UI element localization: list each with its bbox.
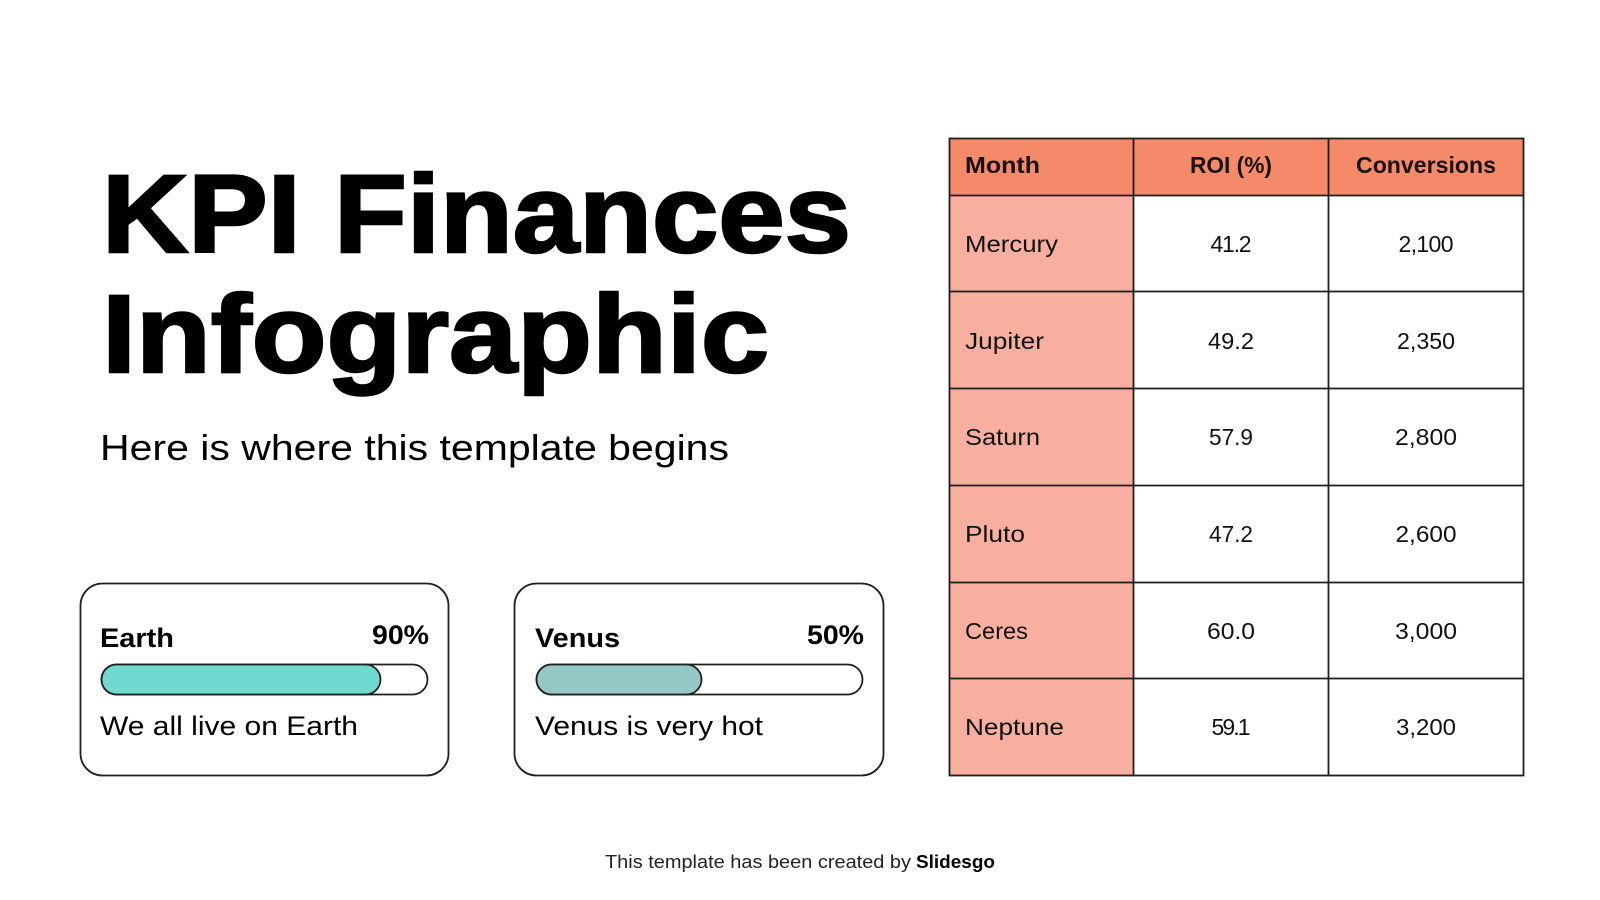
- row: Mercury: 2,100: [1398, 231, 1454, 257]
- table: [950, 138, 1524, 776]
- subtitle: Here is where this template begins: [100, 427, 729, 468]
- table header row: ROI (%): [1190, 152, 1272, 178]
- row: Mercury: [965, 231, 1454, 257]
- Venus percentage: 50%: [807, 620, 864, 650]
- Earth label: Earth: [100, 623, 174, 653]
- footer credit: This template has been created by: [605, 852, 911, 872]
- footer credit: Slidesgo: [916, 852, 995, 872]
- Venus progress bar: [536, 664, 862, 694]
- row: Pluto: 2,600: [1396, 521, 1456, 547]
- title: KPI Finances: [102, 153, 851, 276]
- row: Saturn: 2,800: [1395, 424, 1457, 450]
- row: Neptune: Neptune: [965, 714, 1064, 740]
- row: Ceres: 60.0: [1207, 618, 1255, 644]
- row: Jupiter: [965, 328, 1455, 354]
- panel: Venus: [514, 584, 884, 776]
- title: [102, 153, 851, 396]
- Earth description: We all live on Earth: [100, 711, 358, 741]
- row: Neptune: [965, 714, 1456, 740]
- table first column background: [950, 196, 1133, 775]
- row: Mercury: Mercury: [965, 231, 1059, 257]
- table header row: Conversions: [1356, 152, 1496, 178]
- Venus label: Venus: [535, 623, 620, 653]
- panel: Earth: [80, 584, 448, 776]
- title: Infographic: [102, 273, 769, 396]
- table grid: [950, 138, 1524, 776]
- row: Pluto: 47.2: [1209, 521, 1253, 547]
- row: Saturn: [965, 424, 1457, 450]
- row: Ceres: [965, 618, 1457, 644]
- row: Jupiter: 2,350: [1397, 328, 1455, 354]
- row: Saturn: 57.9: [1209, 424, 1253, 450]
- row: Pluto: [965, 521, 1456, 547]
- row: Mercury: 41.2: [1210, 231, 1252, 257]
- row: Neptune: 3,200: [1396, 714, 1456, 740]
- row: Ceres: 3,000: [1395, 618, 1457, 644]
- row: Jupiter: 49.2: [1208, 328, 1254, 354]
- table header row: Month: [965, 152, 1040, 178]
- row: Ceres: Ceres: [965, 618, 1028, 644]
- table header row: [965, 152, 1496, 178]
- row: Saturn: Saturn: [965, 424, 1040, 450]
- Venus description: Venus is very hot: [535, 711, 764, 741]
- Earth percentage: 90%: [372, 620, 429, 650]
- table header background: [950, 139, 1524, 196]
- Earth progress bar: [102, 664, 428, 694]
- row: Jupiter: Jupiter: [965, 328, 1044, 354]
- row: Pluto: Pluto: [965, 521, 1025, 547]
- row: Neptune: 59.1: [1212, 714, 1250, 740]
